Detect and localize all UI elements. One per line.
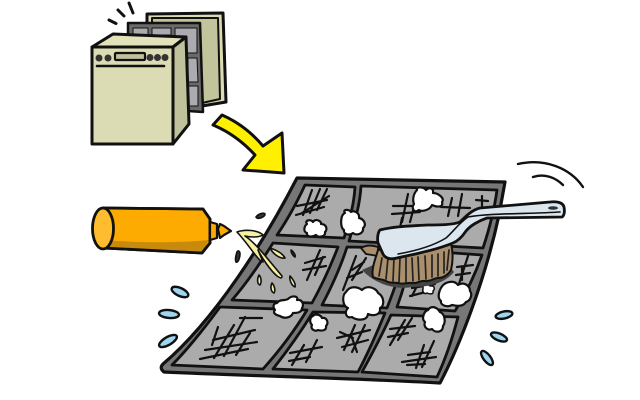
water droplets left bbox=[157, 285, 190, 349]
water droplets right bbox=[479, 310, 513, 367]
arrow: yellow arrow pointing to filter bbox=[213, 115, 284, 173]
panel: air filter with grid of cells bbox=[161, 178, 564, 383]
foam clumps bbox=[274, 187, 471, 332]
dust marks on filter bbox=[200, 189, 488, 368]
spray of cleaning liquid bbox=[236, 213, 295, 293]
icon: air conditioner unit with removed filter bbox=[92, 3, 226, 144]
motion lines of brush bbox=[518, 162, 583, 187]
icon: orange spray can bbox=[92, 208, 231, 253]
brush with bristles and handle bbox=[361, 202, 564, 288]
